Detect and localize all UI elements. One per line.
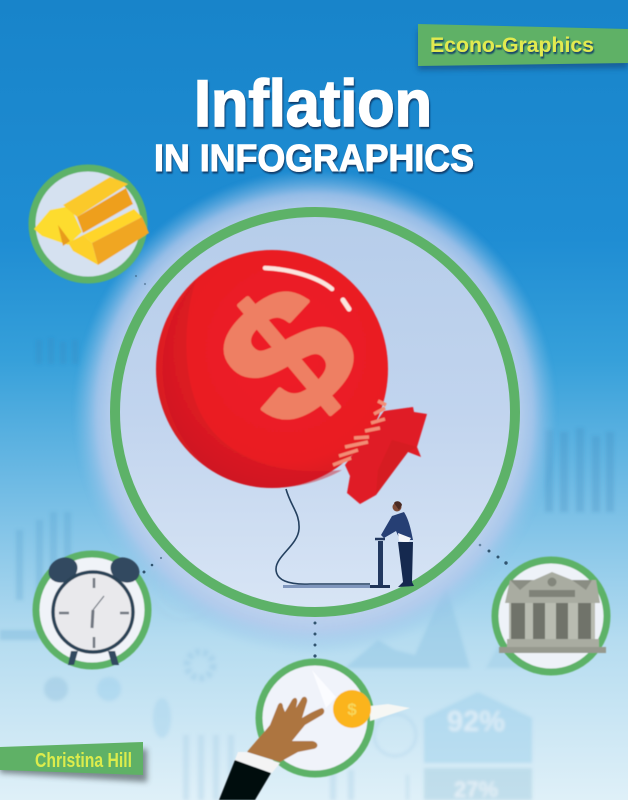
series banner: Econo-Graphics [418,24,628,70]
suit cuff [235,752,280,773]
gold coin [333,690,371,728]
faint background charts and symbols [0,338,614,800]
lower bar [83,209,142,243]
suit sleeve [219,760,271,800]
hand [247,697,324,762]
left bar [34,206,82,245]
businessman with pump [370,501,414,588]
author banner: Christina Hill: Christina Hill [35,750,132,772]
circle: hand reaching for flying coin: $ [347,700,357,719]
series banner: Econo-Graphics: Econo-Graphics [430,34,594,57]
circle: bank building [495,560,607,672]
title [154,66,474,180]
dollar sign: $ [182,244,393,465]
coin wings [312,670,336,708]
dotted connectors [135,275,508,658]
subtitle: IN INFOGRAPHICS [154,138,474,180]
faint background charts and symbols: 92% [447,706,505,738]
circle: gold bars [32,168,149,280]
balloon knot stitches [333,401,386,465]
circle: hand reaching for flying coin [219,662,410,800]
red dollar balloon [156,244,427,504]
balloon shade [163,280,342,488]
author banner: Christina Hill [0,742,147,782]
upper bar [63,177,128,217]
circle: alarm clock [36,553,148,666]
balloon torn end [345,407,427,504]
central glow [73,170,557,654]
title: Inflation [194,66,432,140]
balloon highlights [265,268,332,289]
balloon string and hose [276,489,373,588]
balloon body [156,250,388,488]
main circle [115,212,515,612]
